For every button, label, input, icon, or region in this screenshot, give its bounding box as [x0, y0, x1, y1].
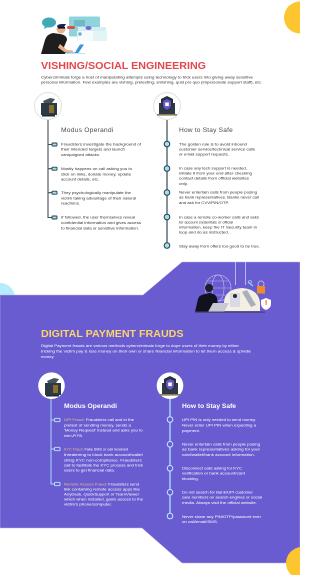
text block: Stay away from offers too good to be true. [179, 243, 260, 248]
text block [61, 142, 142, 230]
text block: Never enter UPI PIN when expecting a [182, 423, 257, 428]
illustration: hacker at laptop [41, 16, 107, 54]
text block: confidential information and gives access [61, 220, 141, 225]
text block: If followed, the user themselves reveal [61, 215, 135, 220]
text block: their intended targets and launch [61, 147, 125, 152]
text block: to financial data or sensitive information. [61, 225, 139, 230]
text block: only. [179, 181, 188, 186]
text block: Mostly happens on call asking you to [61, 166, 132, 171]
icon: laptop with padlock [154, 92, 180, 120]
text block: digital payment intro [41, 343, 251, 359]
icon: hacker at desk [34, 92, 62, 120]
text block: In case a remote co-worker calls and asks [179, 214, 259, 219]
text block: Fraudsters investigate the background of [61, 142, 142, 147]
panel: payment modus operandi [38, 372, 144, 507]
text block: vishing intro: Cybercriminals forge a host of manipulating attempts using technology to trick users into giving away sensitive [41, 74, 253, 79]
text block: The golden rule is to avoid inbound [179, 141, 247, 146]
text block: UPI fraud: UPI Fraud: Fraudsters call and in the [64, 417, 134, 422]
text block: for account credentials or official [179, 219, 233, 224]
text block: blocking. [182, 476, 199, 481]
timeline markers [52, 143, 57, 219]
decorative circle: top right [284, 2, 316, 34]
text block: KYC fraud: users to get financial data. [64, 467, 115, 472]
timeline [169, 398, 171, 516]
text block: digital payment intro: money. [41, 354, 54, 359]
heading: How to Stay Safe [179, 127, 233, 134]
decorative semicircle: light blue [0, 283, 15, 313]
text block: or email support requests. [179, 151, 229, 156]
text block: vishing intro: personal information. Few examples are vishing, pretexting, smishing, quid pro quo (impersonate support staff), etc. [41, 80, 262, 85]
text block: as bank representatives asking for your [182, 447, 261, 452]
text block: digital payment intro: tricking the victim pay & lose money on their own or share financial information to let them access & spindle [41, 348, 251, 353]
text block [179, 141, 260, 248]
panel: vishing how to stay safe [154, 92, 260, 248]
text block: on call/email/SMS. [182, 519, 218, 524]
text block: remote access fraud: AnyDesk, QuickSupport or TeamViewer [64, 492, 140, 497]
panel: payment how to stay safe [157, 372, 262, 524]
text block: Never entertain calls from people posing [179, 190, 257, 195]
text block: UPI PIN is only needed to send money. [182, 417, 256, 422]
text block: card/wallet/bank account information. [182, 452, 255, 457]
text block: UPI fraud: pretext of sending money, sends a [64, 422, 132, 427]
text block: digital payment intro: Digital Payment frauds are various methods cybercriminals forge to dupe users of their money by either [41, 343, 240, 348]
text block: click on links, donate money, update [61, 171, 131, 176]
text block: Never entertain calls from people posing [182, 441, 260, 446]
text block: KYC fraud [64, 447, 144, 472]
text block: initiate it from your end after checking [179, 171, 252, 176]
text block: Do not search for Bank/UPI customer [182, 490, 254, 495]
timeline [51, 398, 54, 484]
panel: digital payment background [0, 262, 300, 563]
timeline markers [54, 418, 60, 486]
panel: vishing modus operandi [34, 92, 142, 230]
text block: customer service/technical service calls [179, 146, 255, 151]
timeline [48, 118, 52, 218]
text block: KYC fraud: citing KYC non-compliance. Fraudsters [64, 457, 142, 462]
text block: UPI fraud: enter UPI PIN. [64, 433, 83, 438]
text block: Never share any PIN/OTP/password ever [182, 514, 262, 519]
heading: digital payment frauds: DIGITAL PAYMENT FRAUDS [41, 329, 184, 340]
illustration: hacker with payment cards [195, 262, 271, 313]
text block: UPI fraud [64, 417, 143, 438]
text block: vishing intro [41, 74, 262, 85]
text block: KYC fraud: call to facilitate the KYC process and trick [64, 462, 143, 467]
heading: Modus Operandi [61, 127, 114, 134]
text block [182, 417, 262, 524]
text block: campaigned attacks. [61, 152, 100, 157]
text block: account details, etc. [61, 176, 99, 181]
text block: remote access fraud [64, 481, 143, 507]
timeline [166, 118, 168, 246]
timeline markers [167, 417, 173, 519]
text block: loop and do as instructed. [179, 229, 229, 234]
timeline markers [164, 141, 170, 248]
heading: Modus Operandi [64, 403, 117, 410]
text block: verification or bank account/card [182, 471, 245, 476]
text block: remote access fraud: victim's phone/computer. [64, 502, 112, 507]
text block: and ask for CVV/PIN/OTP. [179, 200, 229, 205]
text block: media. Always visit the official website. [182, 500, 257, 505]
text block: In case any tech support is needed, [179, 165, 247, 170]
text block: reactions. [61, 200, 80, 205]
icon: laptop with padlock [157, 372, 183, 399]
text block: care numbers on search engines or social [182, 495, 262, 500]
text block: They psychologically manipulate the [61, 190, 131, 195]
text block: remote access fraud: Remote Access Fraud: Fraudsters send [64, 481, 139, 486]
text block: remote access fraud: link containing remote access apps like [64, 486, 140, 491]
text block: information, keep the IT Security team in [179, 224, 257, 229]
text block: remote access fraud: which when installed, gains access to the [64, 497, 143, 502]
text block: KYC fraud: KYC Fraud: Fake SMS or call received [64, 447, 128, 452]
heading: vishing: VISHING/SOCIAL ENGINEERING [41, 61, 206, 72]
text block: as bank representatives. Banks never call [179, 195, 259, 200]
heading: How to Stay Safe [182, 403, 236, 410]
text block: contact details from official websites [179, 176, 249, 181]
icon: hacker at desk [38, 372, 65, 399]
text block: Disconnect calls asking for KYC [182, 465, 242, 470]
decorative circle: bottom right [286, 547, 318, 575]
text block: victim taking advantage of their natural [61, 195, 136, 200]
text block: payment. [182, 428, 200, 433]
text block: KYC fraud: threatening to block bank account/wallet [64, 452, 144, 457]
text block: UPI fraud: 'Money Request' instead and asks you to [64, 428, 143, 433]
